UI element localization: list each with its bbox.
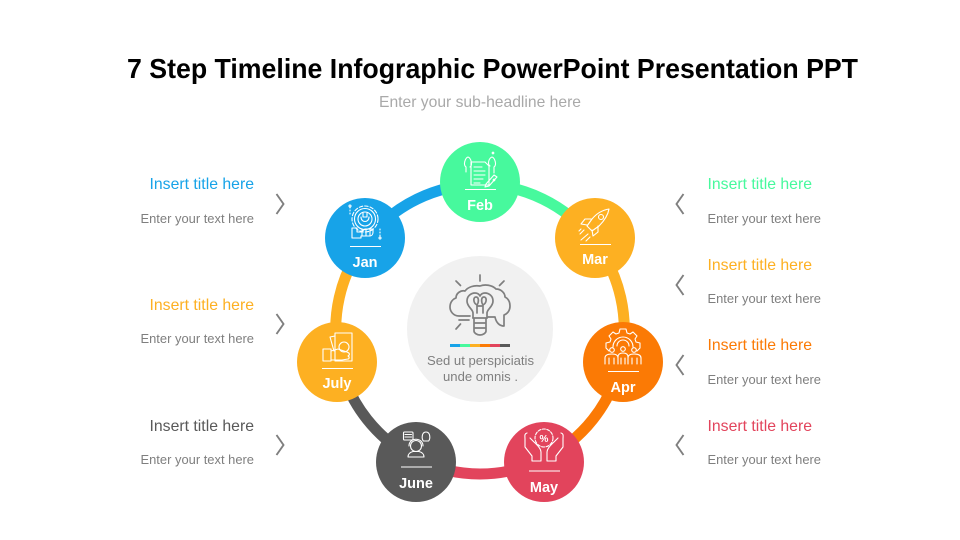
label: July [322,376,352,392]
divider [580,244,611,246]
left text: July: Insert title here [150,297,254,314]
label: June [399,476,433,492]
divider [322,368,353,370]
icon: hand with money [323,333,352,361]
left text: Jan [140,176,254,226]
divider [401,466,432,468]
arrow: right chevron 1 [676,194,684,214]
colour bar [450,344,510,347]
sub-headline: Enter your sub-headline here [379,94,581,111]
node: Mar [555,198,635,278]
label: Jan [352,255,378,271]
right text: Feb [708,176,821,226]
icon: brain bulb [450,275,510,335]
right text: May: Insert title here [708,418,812,435]
centre text [427,354,534,384]
node: May [504,422,584,502]
right text: Apr [708,337,821,387]
right text: Mar: Insert title here [708,257,812,274]
icon: rocket [579,209,609,241]
arrow: right chevron 3 [676,355,684,375]
left text: June: Insert title here [150,418,254,435]
percent: % [540,434,549,445]
label: Feb [467,198,493,214]
right text: Apr: Insert title here [708,337,812,354]
arrow: left chevron 2 [276,314,284,334]
label: May [530,480,558,496]
left text: June: Enter your text here [140,453,254,467]
divider [608,370,639,372]
arrow: right chevron 2 [676,275,684,295]
right text: May [708,418,821,467]
node: Apr [583,322,663,402]
centre text: Sed ut perspiciatis [427,354,534,368]
divider [529,470,560,472]
node: June [376,422,456,502]
left text: Jan: Insert title here [150,176,254,193]
label: Mar [582,252,608,268]
right text: Feb: Insert title here [708,176,812,193]
timeline ring [336,184,624,474]
left text: June [140,418,254,467]
centre panel [407,256,553,402]
divider [465,188,496,190]
right text: Mar: Enter your text here [708,292,821,306]
right text: Apr: Enter your text here [708,373,821,387]
left text: July [140,297,254,346]
right text: May: Enter your text here [708,453,821,467]
icon: hands with percent badge [525,429,563,461]
centre text: unde omnis . [443,370,518,384]
label: Apr [611,380,636,396]
node: Feb [440,142,520,222]
right text: Mar [708,257,821,306]
icon: document and pen [465,152,497,187]
arrow: left chevron 3 [276,435,284,455]
left text: July: Enter your text here [140,332,254,346]
divider [350,246,381,248]
right text: Feb: Enter your text here [708,212,821,226]
icon: person with ideas [404,432,430,457]
icon: gear and hand [349,205,381,239]
node: Jan [325,198,405,278]
left text: Jan: Enter your text here [140,212,254,226]
arrow: left chevron 1 [276,194,284,214]
icon: gear and team [605,329,641,364]
node: July [297,322,377,402]
title: 7 Step Timeline Infographic PowerPoint Presentation PPT [127,53,858,84]
arrow: right chevron 4 [676,435,684,455]
